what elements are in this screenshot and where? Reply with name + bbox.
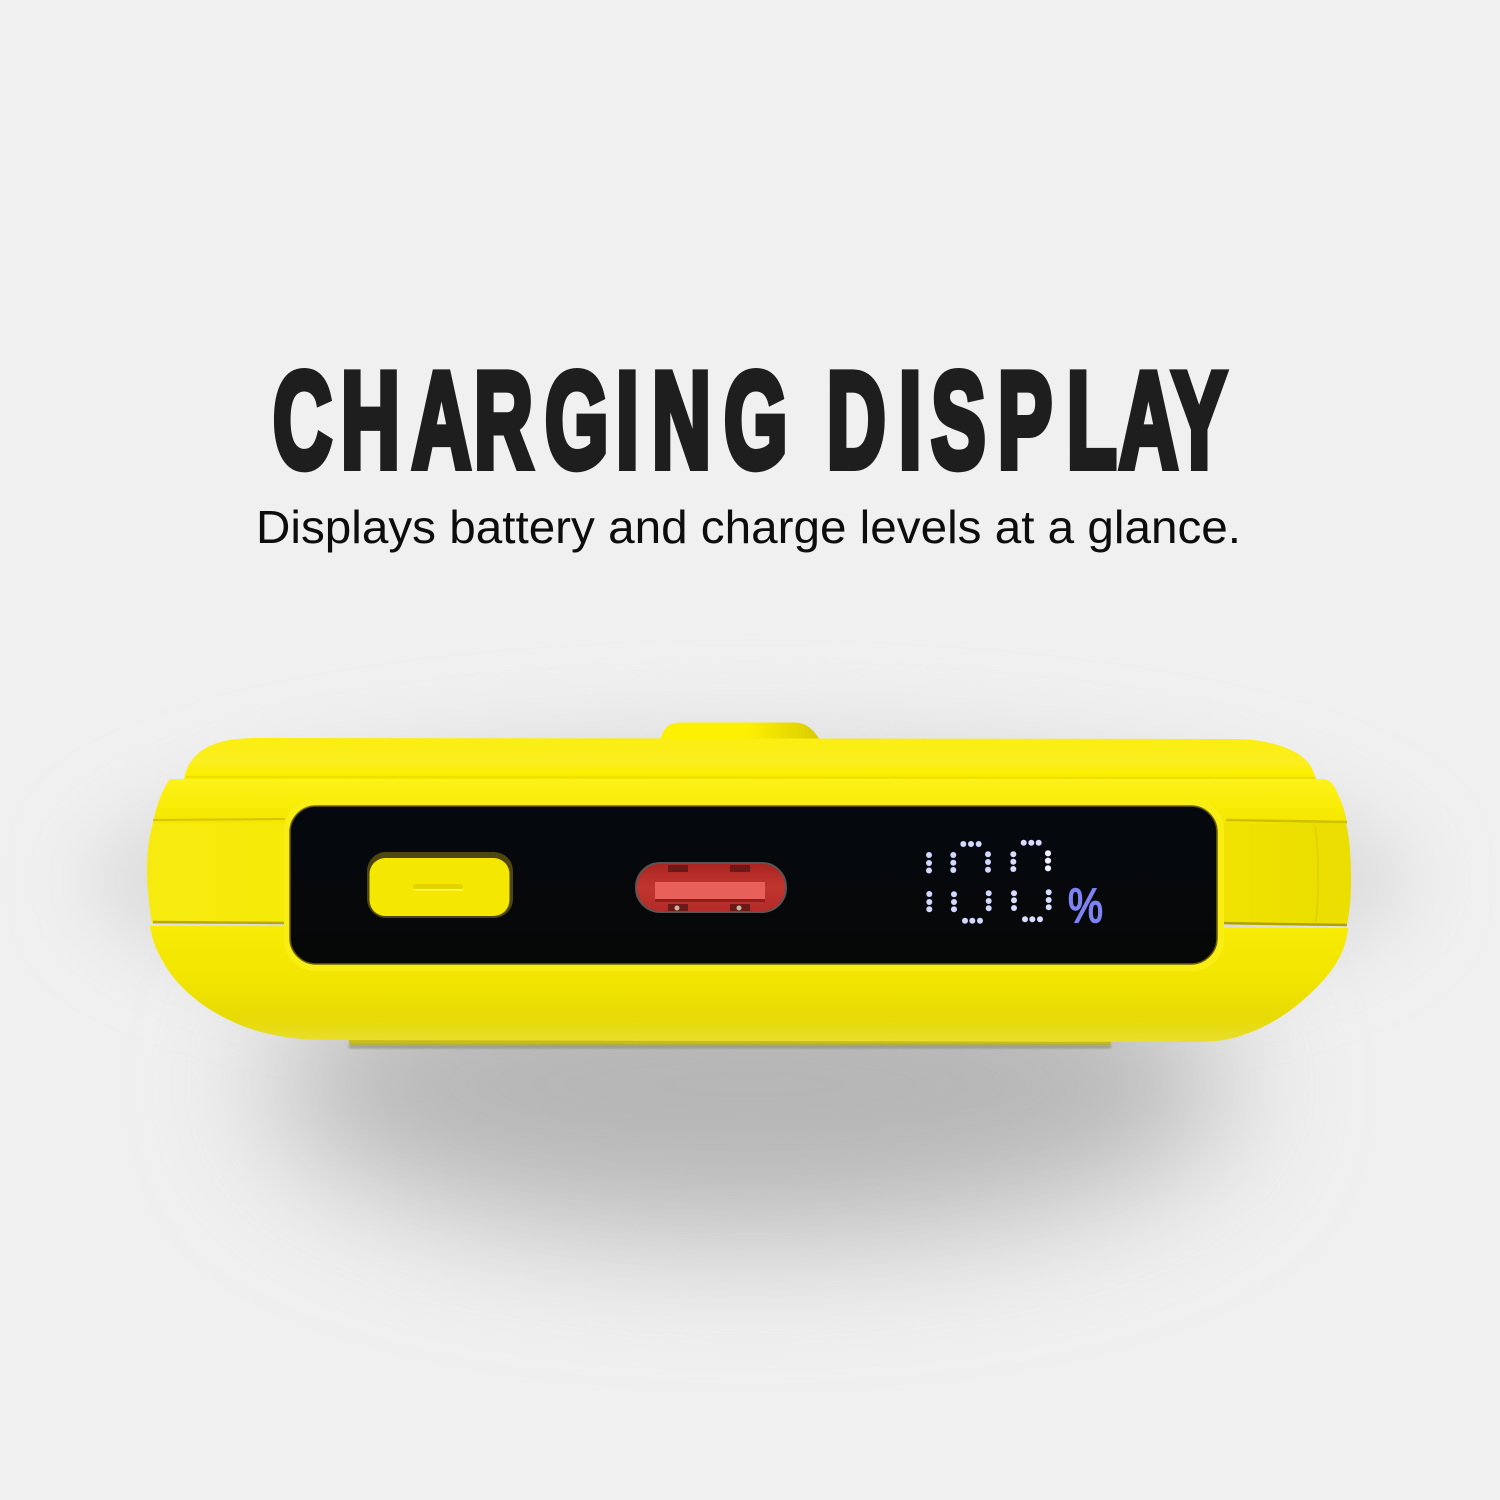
top lid	[184, 738, 1316, 782]
battery level readout 100%	[926, 840, 1103, 933]
title: CHARGING	[273, 343, 787, 496]
bottom shell	[150, 926, 1348, 1042]
soft halo shadow behind power bank	[90, 730, 1410, 1030]
centre band	[147, 823, 1351, 924]
display panel	[290, 806, 1217, 964]
power button	[367, 852, 513, 918]
usb-c port	[636, 863, 786, 912]
middle shell layer	[153, 779, 1347, 824]
power bank	[147, 722, 1351, 1048]
bottom foot strip	[349, 1036, 1111, 1048]
subtitle: Displays battery and charge levels at a glance.	[256, 501, 1241, 553]
digit 0 (tens)	[960, 841, 992, 924]
title	[273, 343, 1226, 496]
percent sign: %	[1068, 880, 1103, 933]
lens rim	[284, 799, 1224, 971]
title: DISPLAY	[827, 343, 1226, 496]
top knob	[660, 722, 820, 740]
shell seams	[153, 777, 1347, 925]
digit 0 (units)	[1010, 840, 1052, 922]
floor shadow beneath power bank	[270, 935, 1230, 1235]
digit 1	[926, 852, 957, 912]
